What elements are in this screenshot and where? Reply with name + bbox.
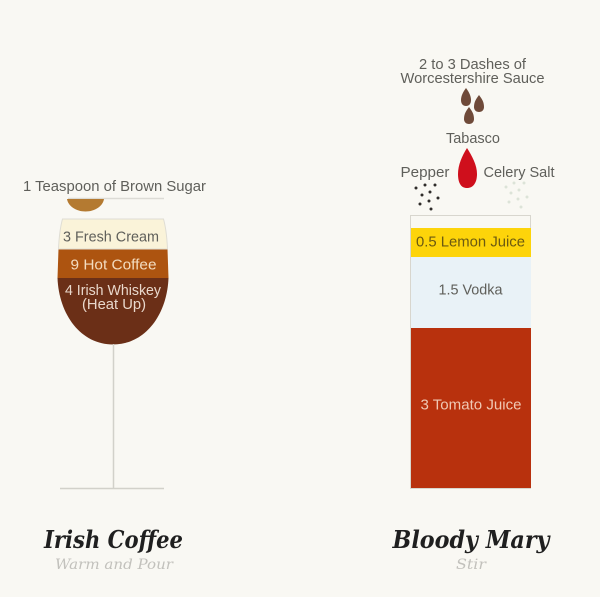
label: vodka: 1.5 Vodka (438, 282, 503, 298)
title: Irish Coffee: Irish Coffee (43, 525, 183, 554)
label: tabasco: Tabasco (446, 130, 500, 147)
icon: pepper specks (414, 184, 440, 210)
highball glass (410, 216, 531, 488)
layer: vodka (411, 257, 531, 328)
label: brown sugar: 1 Teaspoon of Brown Sugar (23, 178, 206, 195)
subtitle: method: Warm and Pour (55, 557, 175, 573)
label: lemon juice: 0.5 Lemon Juice (416, 234, 525, 250)
label: coffee: 9 Hot Coffee (70, 256, 156, 274)
panel: Irish Coffee (23, 178, 206, 573)
label: worcestershire sauce line two: Worcestershire Sauce (400, 70, 544, 87)
label: tomato juice: 3 Tomato Juice (420, 396, 522, 414)
label: worcestershire sauce: 2 to 3 Dashes of (419, 56, 527, 73)
layer: irish whiskey (58, 278, 168, 344)
label: whiskey: 4 Irish Whiskey (65, 282, 161, 299)
glass stem and base (60, 344, 164, 488)
glass outline (410, 216, 530, 488)
layer: tomato juice (411, 328, 531, 488)
wine glass (58, 219, 168, 488)
label: celery salt: Celery Salt (484, 164, 555, 181)
label: cream: 3 Fresh Cream (63, 228, 159, 246)
title: Bloody Mary: Bloody Mary (392, 525, 551, 554)
icon: teaspoon of brown sugar (67, 198, 164, 212)
subtitle: method: Stir (456, 557, 488, 573)
label: pepper: Pepper (400, 164, 450, 181)
panel: Bloody Mary (392, 56, 555, 573)
layer: fresh cream (58, 219, 168, 249)
icon: celery salt specks (504, 182, 528, 208)
icon: sauce drops (461, 88, 484, 124)
layer: hot coffee (58, 249, 168, 278)
label: heat up: (Heat Up) (82, 296, 146, 313)
layer: lemon juice (411, 228, 531, 257)
icon: tabasco drop (458, 148, 477, 188)
